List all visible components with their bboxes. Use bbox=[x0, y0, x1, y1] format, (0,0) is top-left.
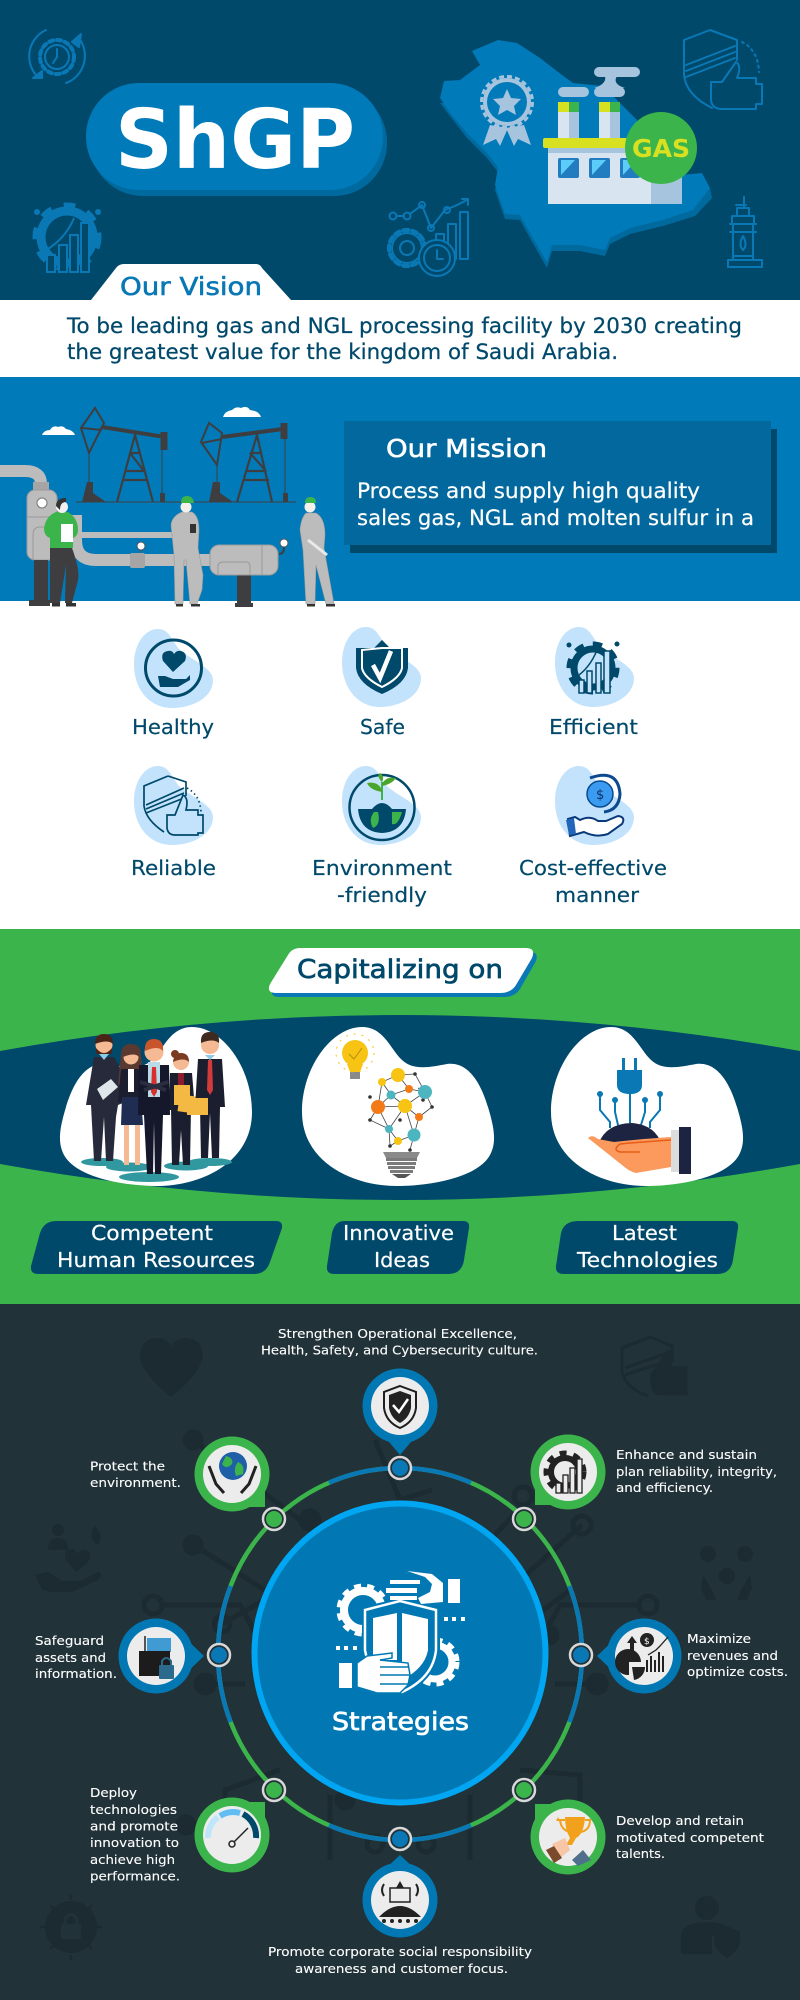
pin: culture shield: Health, Safety, and Cybersecurity culture. bbox=[261, 1342, 538, 1358]
faint icon: person shield bbox=[681, 1896, 740, 1958]
attribute: healthy: Healthy bbox=[132, 715, 214, 739]
pin: reliability: plan reliability, integrity, bbox=[616, 1464, 777, 1479]
pin: culture shield: Strengthen Operational Excellence, bbox=[278, 1326, 517, 1341]
blob: people bbox=[60, 1027, 252, 1186]
label: human resources: Competent bbox=[91, 1221, 213, 1245]
pin: talents bbox=[530, 1800, 764, 1874]
faint icon: heart bbox=[140, 1338, 203, 1397]
label: innovative ideas bbox=[327, 1221, 469, 1274]
icon: gear with bar chart bbox=[34, 207, 101, 272]
pin: revenues: revenues and bbox=[687, 1648, 778, 1663]
pin: reliability: Enhance and sustain bbox=[616, 1447, 757, 1462]
faint icon: security chip bbox=[40, 1895, 102, 1960]
attribute: healthy bbox=[132, 629, 214, 739]
icon: gas bottle bbox=[728, 197, 762, 267]
panel: mission attributes bbox=[0, 601, 800, 929]
pin: talents: motivated competent bbox=[616, 1830, 764, 1845]
illustration: gas factory bbox=[543, 67, 697, 204]
ring bbox=[218, 1468, 582, 1840]
attribute: cost-effective: manner bbox=[555, 883, 640, 907]
attribute: safe: Safe bbox=[360, 715, 405, 739]
pin: revenues: Maximize bbox=[687, 1631, 751, 1646]
pin: safeguard assets: information. bbox=[35, 1666, 117, 1681]
panel: capitalizing on bbox=[0, 929, 800, 1304]
icon: gears chart and clock bbox=[389, 199, 468, 276]
pin: culture shield bbox=[261, 1326, 538, 1455]
label: latest technologies: Technologies bbox=[576, 1248, 718, 1272]
label: latest technologies bbox=[556, 1221, 738, 1274]
center circle: Strategies bbox=[332, 1707, 469, 1736]
faint icon: dollars bbox=[700, 1546, 753, 1600]
pin: safeguard assets bbox=[35, 1618, 204, 1694]
icon: shield hands gears bbox=[336, 1571, 465, 1696]
title pill: ShGP bbox=[115, 93, 355, 188]
worker: engineer right bbox=[300, 497, 335, 606]
label: human resources: Human Resources bbox=[57, 1248, 255, 1272]
worker: engineer left bbox=[171, 496, 203, 606]
mission box: Process and supply high quality bbox=[357, 479, 700, 503]
faint icon: care hand bbox=[35, 1524, 101, 1592]
attribute: cost-effective: $ bbox=[596, 788, 604, 803]
mission box bbox=[344, 421, 777, 553]
icon: clock gear bbox=[29, 30, 85, 83]
pin: reliability: and efficiency. bbox=[616, 1480, 713, 1495]
pin: safeguard assets: Safeguard bbox=[35, 1633, 104, 1648]
pin: safeguard assets: assets and bbox=[35, 1650, 106, 1665]
pin: performance gauge: and promote bbox=[90, 1818, 178, 1834]
title pill bbox=[86, 83, 387, 196]
icon: award badge bbox=[482, 76, 532, 146]
pin: talents: Develop and retain bbox=[616, 1813, 744, 1828]
vision text: To be leading gas and NGL processing facility by 2030 creating bbox=[66, 314, 742, 338]
pipes and tank bbox=[0, 471, 288, 607]
pin: social responsibility bbox=[268, 1855, 532, 1976]
pin: revenues: optimize costs. bbox=[687, 1664, 788, 1679]
pin: environment bbox=[90, 1436, 270, 1512]
label: latest technologies: Latest bbox=[612, 1221, 677, 1245]
center circle bbox=[254, 1504, 546, 1802]
attribute: safe bbox=[342, 627, 421, 739]
pin: environment: environment. bbox=[90, 1475, 181, 1490]
pin: reliability bbox=[530, 1434, 777, 1510]
panel: mission bbox=[0, 377, 800, 607]
heading tab bbox=[269, 948, 537, 997]
illustration: gas factory: GAS bbox=[632, 134, 690, 163]
blob: ideas bbox=[302, 1027, 494, 1186]
pin: performance gauge: Deploy bbox=[90, 1785, 137, 1800]
heading tab: Capitalizing on bbox=[297, 955, 503, 985]
vision tab bbox=[91, 264, 291, 301]
vision text bbox=[66, 314, 742, 364]
label: innovative ideas: Innovative bbox=[343, 1221, 454, 1245]
attribute: environment-friendly: Environment bbox=[312, 856, 452, 880]
pin: revenues: $ bbox=[644, 1637, 650, 1647]
ring nodes bbox=[208, 1457, 592, 1850]
mission box: sales gas, NGL and molten sulfur in a bbox=[357, 506, 754, 530]
pin: social responsibility: awareness and customer focus. bbox=[295, 1961, 508, 1976]
icon: small light bulb bbox=[336, 1034, 374, 1079]
pin: performance gauge: technologies bbox=[90, 1802, 177, 1817]
attribute: cost-effective bbox=[519, 766, 667, 907]
label: human resources bbox=[31, 1221, 282, 1274]
pin: social responsibility: Promote corporate social responsibility bbox=[268, 1944, 532, 1959]
blob: technology bbox=[551, 1027, 743, 1186]
pin: performance gauge: performance. bbox=[90, 1868, 180, 1884]
pin: environment: Protect the bbox=[90, 1458, 165, 1474]
pin: performance gauge bbox=[90, 1785, 270, 1884]
attribute: reliable bbox=[131, 766, 216, 880]
pin: revenues bbox=[597, 1618, 788, 1694]
vision tab: Our Vision bbox=[120, 272, 262, 301]
attribute: environment-friendly: -friendly bbox=[337, 883, 427, 907]
pump jacks bbox=[76, 408, 296, 502]
background circuit lines bbox=[144, 1432, 657, 1860]
icon: shield thumb bbox=[684, 30, 762, 109]
pin: performance gauge: innovation to bbox=[90, 1835, 179, 1850]
clouds bbox=[42, 407, 261, 435]
panel: vision bbox=[0, 264, 800, 377]
team of people bbox=[81, 1032, 232, 1182]
pin: talents: talents. bbox=[616, 1846, 665, 1861]
illustration: Saudi Arabia map bbox=[440, 40, 712, 268]
worker: green shirt bbox=[44, 498, 78, 606]
label: innovative ideas: Ideas bbox=[374, 1248, 430, 1272]
vision text: the greatest value for the kingdom of Saudi Arabia. bbox=[67, 340, 618, 364]
illustration: plug and hand bbox=[588, 1058, 691, 1174]
attribute: efficient bbox=[549, 627, 638, 739]
attribute: environment-friendly bbox=[312, 766, 452, 907]
dark lens band bbox=[0, 1015, 800, 1200]
panel: strategies bbox=[0, 1304, 800, 2000]
mission box: Our Mission bbox=[386, 434, 547, 463]
attribute: cost-effective: Cost-effective bbox=[519, 856, 667, 880]
attribute: reliable: Reliable bbox=[131, 856, 216, 880]
panel: header bbox=[0, 0, 800, 300]
attribute: efficient: Efficient bbox=[549, 715, 638, 739]
illustration: network bulb bbox=[368, 1068, 434, 1178]
pin: performance gauge: achieve high bbox=[90, 1852, 175, 1867]
faint icon: shield thumb bbox=[622, 1337, 686, 1396]
